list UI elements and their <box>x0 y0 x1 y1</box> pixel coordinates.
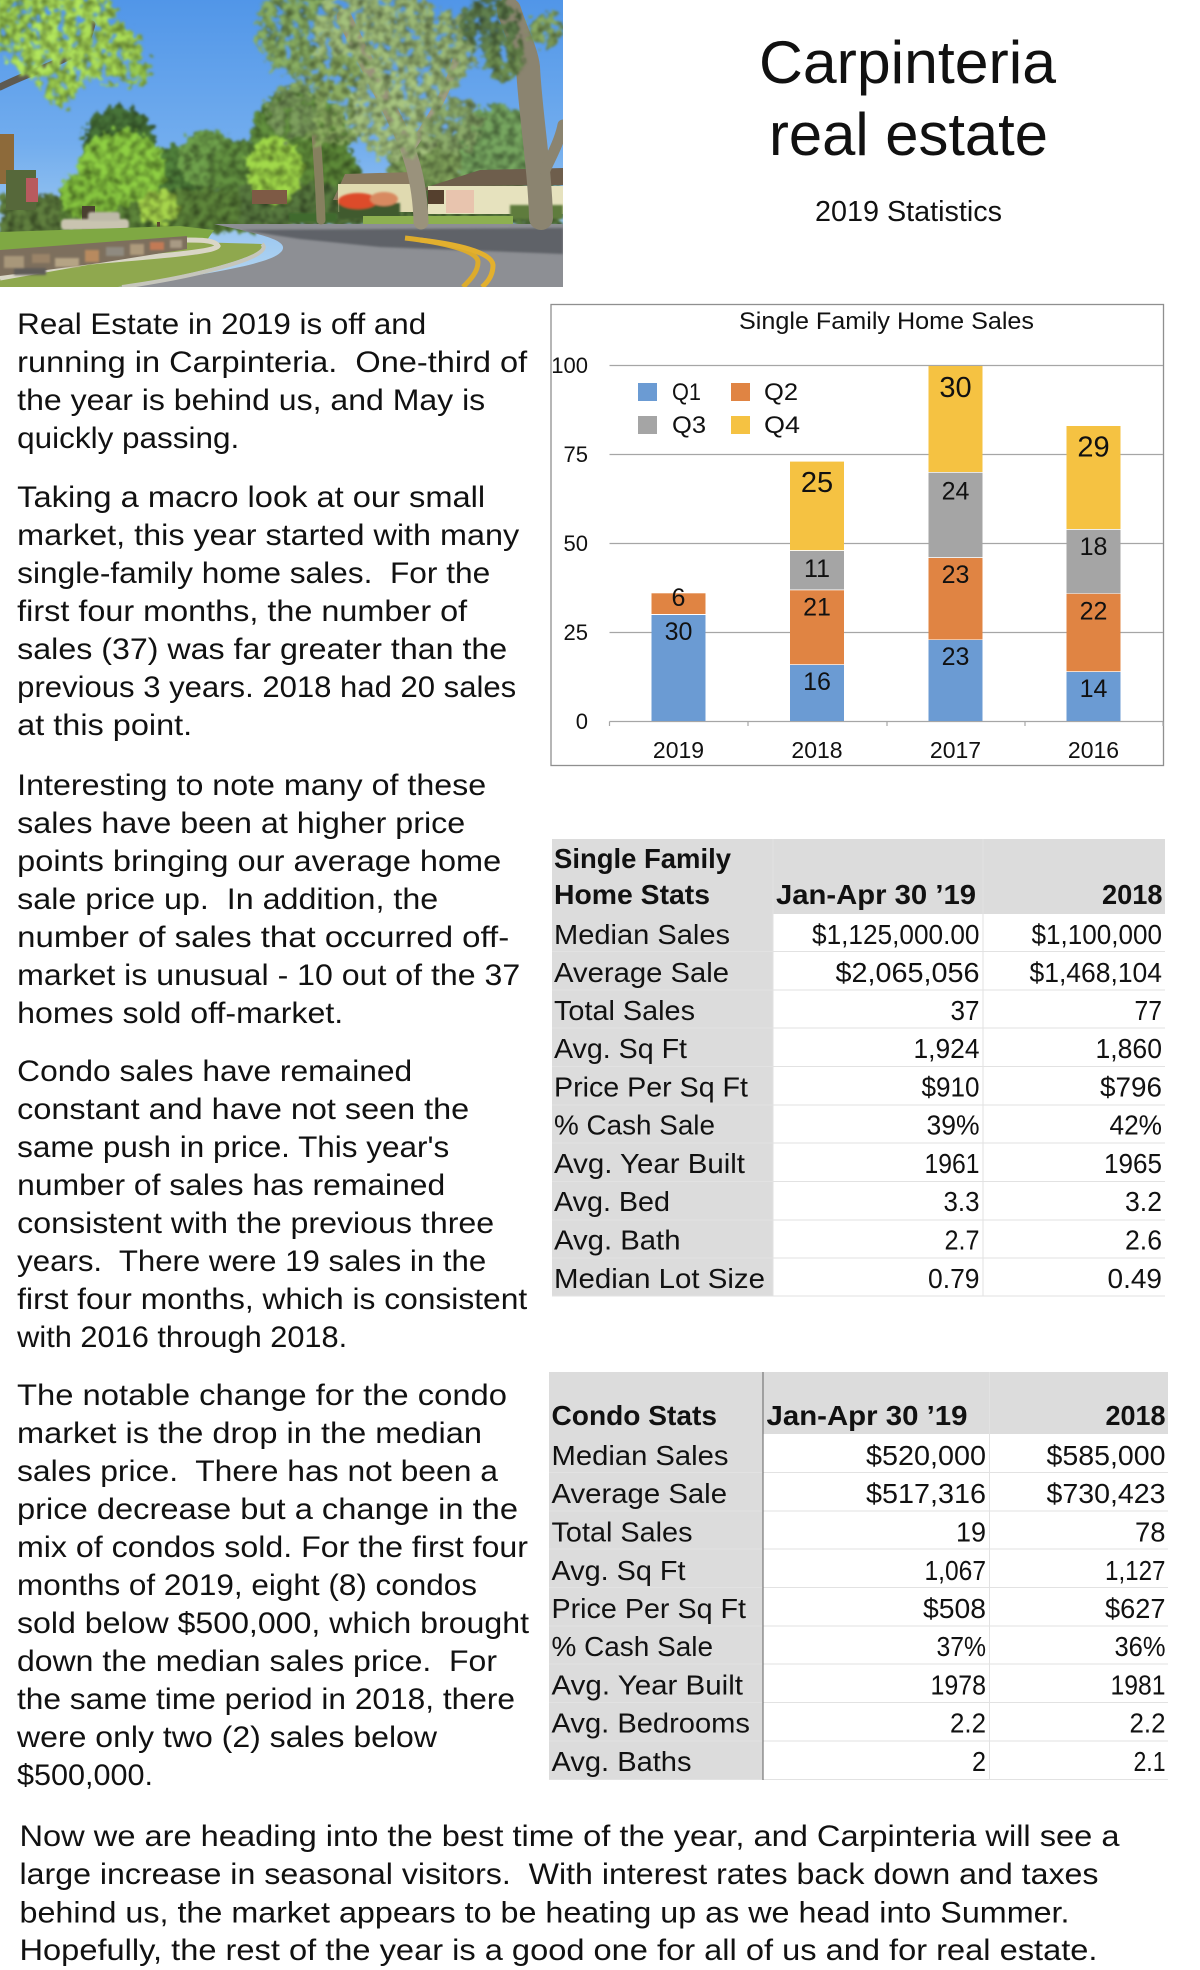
car <box>61 212 129 230</box>
row: Avg. Bedrooms: Avg. Bedrooms <box>552 1708 750 1738</box>
text block: condo median paragraph: The notable change for the condo <box>17 1379 507 1412</box>
row: Avg. Bath: 2.7 <box>944 1224 980 1256</box>
yellow road lines <box>405 238 478 287</box>
text block: intro paragraph <box>17 308 528 455</box>
row: % Cash Sale: 39% <box>926 1110 980 1140</box>
text block: condo sales paragraph: number of sales has remained <box>17 1169 445 1202</box>
text block: condo median paragraph: $500,000. <box>17 1759 153 1792</box>
row: Avg. Baths: 2.1 <box>1134 1746 1166 1777</box>
text block: condo sales paragraph: with 2016 through 2018. <box>16 1321 347 1354</box>
x axis labels: 2018 <box>791 737 843 763</box>
bar: 2018 <box>790 462 844 721</box>
row: Avg. Bath <box>554 1224 1162 1256</box>
row: % Cash Sale: 42% <box>1110 1110 1162 1140</box>
background trees <box>0 90 563 237</box>
row: Avg. Year Built: 1981 <box>1110 1670 1166 1700</box>
title <box>759 29 1057 168</box>
row: Avg. Sq Ft: Avg. Sq Ft <box>554 1033 687 1064</box>
row: % Cash Sale: % Cash Sale <box>552 1631 713 1662</box>
bar: 2018: 11 <box>804 555 830 583</box>
y axis labels: 25 <box>564 620 588 645</box>
legend: Q1 <box>672 379 701 406</box>
text block: price points paragraph: sales have been at higher price <box>17 807 465 840</box>
text block: price points paragraph: Interesting to note many of these <box>17 769 486 802</box>
y axis labels: 100 <box>551 353 588 378</box>
text block: macro look paragraph: previous 3 years. 2018 had 20 sales <box>17 671 516 704</box>
y axis labels: 75 <box>564 442 588 467</box>
row: Avg. Bath: 2.6 <box>1125 1224 1162 1256</box>
row: Price Per Sq Ft <box>552 1593 1166 1624</box>
row: Avg. Sq Ft: 1,924 <box>914 1033 980 1064</box>
row: Avg. Bed <box>554 1186 1162 1217</box>
row: Median Sales <box>554 919 1162 950</box>
bar: 2018: 16 <box>803 668 831 696</box>
table: Condo Stats <box>549 1372 1168 1780</box>
text block: macro look paragraph: first four months, the number of <box>17 595 468 628</box>
bar: 2017: 24 <box>942 478 969 506</box>
bar: 2017: 30 <box>939 372 972 404</box>
text block: closing paragraph: Hopefully, the rest of the year is a good one for all of us and for real estate. <box>20 1934 1098 1967</box>
row: Avg. Bed: 3.3 <box>944 1186 980 1217</box>
row: % Cash Sale: % Cash Sale <box>554 1110 715 1140</box>
row: Median Sales: $1,100,000 <box>1032 919 1162 950</box>
row: Total Sales: Total Sales <box>552 1516 692 1548</box>
bar: 2016 <box>1066 426 1120 721</box>
text block: price points paragraph: number of sales that occurred off- <box>17 921 509 954</box>
text block: closing paragraph: Now we are heading into the best time of the year, and Carpinteria will see a <box>20 1820 1120 1853</box>
legend: Q4 <box>764 412 800 439</box>
text block: closing paragraph <box>20 1820 1120 1967</box>
bar: 2017: 23 <box>942 561 969 589</box>
text block: price points paragraph <box>17 769 520 1030</box>
text block: condo sales paragraph: years. There were 19 sales in the <box>17 1245 486 1278</box>
text block: intro paragraph: running in Carpinteria. One-third of <box>17 346 528 379</box>
y axis labels: 0 <box>576 709 588 734</box>
text block: macro look paragraph: single-family home sales. For the <box>17 557 490 590</box>
x axis labels: 2019 <box>653 737 704 763</box>
text block: condo sales paragraph: consistent with the previous three <box>17 1207 494 1240</box>
row: Average Sale: $517,316 <box>866 1478 986 1509</box>
photo: tree-lined Carpinteria street <box>0 0 563 287</box>
row: Total Sales: Total Sales <box>554 995 695 1026</box>
trunks and branches <box>0 10 563 222</box>
row: Price Per Sq Ft: $627 <box>1105 1593 1166 1624</box>
text block: macro look paragraph: Taking a macro look at our small <box>17 481 485 514</box>
row: Avg. Sq Ft: 1,860 <box>1096 1033 1162 1064</box>
row: Avg. Sq Ft: 1,127 <box>1105 1555 1166 1586</box>
bright mid trees <box>60 130 303 224</box>
table header: Condo Stats <box>552 1400 717 1431</box>
row: Median Sales: $585,000 <box>1046 1440 1166 1471</box>
road <box>120 224 563 287</box>
row: Avg. Bath: Avg. Bath <box>554 1224 680 1256</box>
row: Avg. Bedrooms: 2.2 <box>1130 1708 1166 1738</box>
text block: condo median paragraph: sales price. There has not been a <box>17 1455 498 1488</box>
text block: condo sales paragraph: first four months, which is consistent <box>17 1283 528 1316</box>
row: Avg. Year Built <box>554 1148 1162 1179</box>
title: Carpinteria <box>759 29 1057 96</box>
table header <box>552 1400 1166 1431</box>
row: Median Lot Size <box>554 1263 1162 1294</box>
legend <box>638 379 800 439</box>
subtitle: 2019 Statistics <box>815 196 1002 228</box>
row: Average Sale: Average Sale <box>554 957 729 988</box>
row: Avg. Sq Ft: 1,067 <box>924 1555 986 1586</box>
row: Median Sales: $520,000 <box>866 1440 986 1471</box>
row: Avg. Year Built: 1978 <box>930 1670 986 1700</box>
row: Price Per Sq Ft: $508 <box>923 1593 986 1624</box>
row: Avg. Sq Ft <box>554 1033 1162 1064</box>
text block: price points paragraph: points bringing our average home <box>17 845 501 878</box>
row: Price Per Sq Ft: $910 <box>922 1072 980 1102</box>
x axis labels: 2016 <box>1068 737 1119 763</box>
text block: condo sales paragraph: constant and have not seen the <box>17 1093 469 1126</box>
legend: Q3 <box>672 412 706 439</box>
text block: condo median paragraph: months of 2019, eight (8) condos <box>17 1569 477 1602</box>
table: Single Family Home Stats <box>552 839 1165 1296</box>
bar: 2016: 14 <box>1080 675 1107 703</box>
table header: Jan-Apr 30 ’19 <box>776 879 976 910</box>
text block: macro look paragraph: at this point. <box>17 709 192 742</box>
text block: intro paragraph: Real Estate in 2019 is off and <box>17 308 426 341</box>
table header: 2018 <box>1102 879 1162 910</box>
row: Total Sales <box>552 1516 1166 1548</box>
title: real estate <box>769 101 1048 168</box>
y axis labels: 50 <box>564 531 588 556</box>
text block: intro paragraph: quickly passing. <box>17 422 239 455</box>
table header: Single Family <box>554 843 731 874</box>
text block: closing paragraph: large increase in seasonal visitors. With interest rates back down and taxes <box>20 1858 1098 1891</box>
row: Average Sale: Average Sale <box>552 1478 727 1509</box>
text block: condo median paragraph: mix of condos sold. For the first four <box>17 1531 528 1564</box>
row: Median Lot Size: Median Lot Size <box>554 1263 765 1294</box>
bar: 2016: 29 <box>1077 432 1110 464</box>
table header: Jan-Apr 30 ’19 <box>766 1400 968 1431</box>
row: Avg. Year Built: 1965 <box>1104 1148 1162 1179</box>
row: Average Sale: $2,065,056 <box>836 957 980 988</box>
text block: condo median paragraph: down the median sales price. For <box>17 1645 497 1678</box>
row: Average Sale <box>552 1478 1166 1509</box>
bar: 2016: 18 <box>1080 533 1107 561</box>
row: Median Sales: Median Sales <box>552 1440 728 1471</box>
row: Price Per Sq Ft: $796 <box>1100 1072 1162 1102</box>
row: Total Sales: 19 <box>956 1516 986 1548</box>
bar: 2017 <box>928 366 982 721</box>
text block: condo median paragraph: market is the drop in the median <box>17 1417 482 1450</box>
text block: condo median paragraph: the same time period in 2018, there <box>17 1683 515 1716</box>
row: Total Sales: 78 <box>1135 1516 1166 1548</box>
legend: Q2 <box>764 379 798 406</box>
flowers and hedges <box>289 192 563 222</box>
bar: 2018: 25 <box>801 467 833 499</box>
table header: 2018 <box>1106 1400 1166 1431</box>
row: Avg. Baths: Avg. Baths <box>552 1746 692 1777</box>
x axis labels <box>653 737 1119 763</box>
row: Avg. Sq Ft <box>552 1555 1166 1586</box>
text block: price points paragraph: market is unusual - 10 out of the 37 <box>17 959 520 992</box>
row: Avg. Year Built <box>552 1670 1166 1700</box>
text block: condo median paragraph <box>16 1379 530 1792</box>
row: Price Per Sq Ft: Price Per Sq Ft <box>552 1593 746 1624</box>
row: Total Sales: 37 <box>950 995 980 1026</box>
row: Total Sales: 77 <box>1134 995 1162 1026</box>
row: Price Per Sq Ft <box>554 1072 1162 1102</box>
stone wall <box>0 236 187 276</box>
row: Avg. Sq Ft: Avg. Sq Ft <box>552 1555 686 1586</box>
houses <box>0 134 14 184</box>
row: Average Sale <box>554 957 1162 988</box>
text block: condo sales paragraph: same push in price. This year's <box>17 1131 449 1164</box>
row: Average Sale: $1,468,104 <box>1030 957 1162 988</box>
x axis labels: 2017 <box>930 737 981 763</box>
row: Avg. Bedrooms <box>552 1708 1166 1738</box>
text block: condo median paragraph: were only two (2) sales below <box>16 1721 437 1754</box>
text block: closing paragraph: behind us, the market appears to be heating up as we head into Summer. <box>20 1896 1070 1930</box>
row: Median Lot Size: 0.79 <box>928 1263 980 1294</box>
row: Median Sales <box>552 1440 1166 1471</box>
text block: price points paragraph: homes sold off-market. <box>17 997 343 1030</box>
row: Median Lot Size: 0.49 <box>1108 1263 1162 1294</box>
chart title: Single Family Home Sales <box>739 308 1034 335</box>
y axis labels <box>551 353 588 734</box>
bar: 2018: 21 <box>803 594 831 622</box>
lower lawn and curb <box>0 242 263 287</box>
tree canopies <box>0 0 152 106</box>
row: % Cash Sale: 36% <box>1114 1631 1166 1662</box>
row: % Cash Sale <box>554 1110 1162 1140</box>
text block: condo median paragraph: sold below $500,000, which brought <box>17 1607 530 1640</box>
row: Avg. Baths: 2 <box>972 1746 986 1777</box>
text block: macro look paragraph <box>17 481 519 742</box>
row: Avg. Baths <box>552 1746 1166 1777</box>
row: Average Sale: $730,423 <box>1046 1478 1166 1509</box>
text block: condo median paragraph: price decrease but a change in the <box>17 1493 518 1526</box>
bar: 2019 <box>652 584 706 721</box>
row: Avg. Year Built: Avg. Year Built <box>552 1670 743 1700</box>
lawns <box>363 216 513 224</box>
text block: condo sales paragraph <box>16 1055 528 1354</box>
row: % Cash Sale <box>552 1631 1166 1662</box>
table header: Home Stats <box>554 879 710 910</box>
row: Avg. Bedrooms: 2.2 <box>950 1708 986 1738</box>
row: Median Sales: Median Sales <box>554 919 730 950</box>
bar: 2019: 30 <box>665 618 692 646</box>
row: Avg. Year Built: Avg. Year Built <box>554 1148 745 1179</box>
bar: 2017: 23 <box>942 643 969 671</box>
text block: condo sales paragraph: Condo sales have remained <box>17 1055 412 1088</box>
row: Median Sales: $1,125,000.00 <box>812 919 980 950</box>
text block: intro paragraph: the year is behind us, and May is <box>17 384 485 417</box>
text block: macro look paragraph: market, this year started with many <box>17 519 519 552</box>
bar: 2019: 6 <box>672 584 685 612</box>
row: Avg. Bed: Avg. Bed <box>554 1186 670 1217</box>
text block: macro look paragraph: sales (37) was far greater than the <box>17 633 507 666</box>
stacked bar chart: Single Family Home Sales <box>551 304 1164 766</box>
text block: price points paragraph: sale price up. In addition, the <box>17 883 438 916</box>
bar: 2016: 22 <box>1080 598 1107 626</box>
row: Total Sales <box>554 995 1162 1026</box>
table header <box>554 843 1162 910</box>
row: Avg. Year Built: 1961 <box>924 1148 980 1179</box>
row: % Cash Sale: 37% <box>936 1631 986 1662</box>
row: Avg. Bed: 3.2 <box>1125 1186 1162 1217</box>
row: Price Per Sq Ft: Price Per Sq Ft <box>554 1072 748 1102</box>
